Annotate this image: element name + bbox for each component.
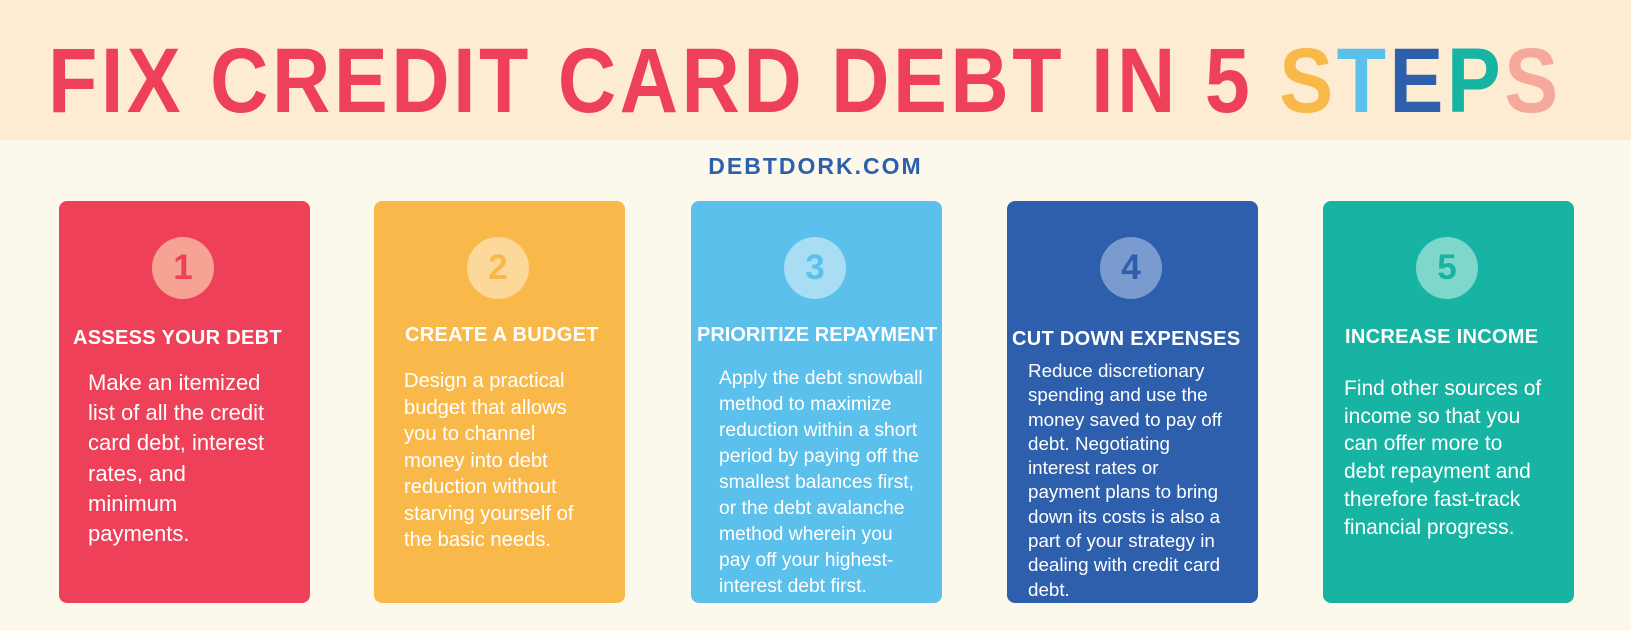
text 1: rates, and bbox=[88, 461, 186, 486]
text 1: minimum bbox=[88, 491, 177, 516]
text 3 bbox=[719, 368, 923, 597]
text 4: Reduce discretionary bbox=[1028, 360, 1204, 381]
text 2: starving yourself of bbox=[404, 502, 573, 524]
text 1: list of all the credit bbox=[88, 400, 264, 425]
icon: number 4: 4 bbox=[1121, 248, 1141, 287]
text 3: period by paying off the bbox=[719, 446, 919, 467]
text 4: dealing with credit card bbox=[1028, 554, 1220, 575]
icon: number 5 bbox=[1416, 237, 1478, 299]
text 3: smallest balances first, bbox=[719, 472, 914, 493]
text 5: income so that you bbox=[1344, 405, 1520, 428]
site url: DEBTDORK.COM bbox=[708, 153, 923, 179]
text 4: money saved to pay off bbox=[1028, 409, 1222, 430]
card 5 bbox=[1323, 201, 1574, 603]
text 4: debt. bbox=[1028, 579, 1070, 600]
text 5: Find other sources of bbox=[1344, 377, 1541, 400]
title: FIX CREDIT CARD DEBT IN 5 STEPS bbox=[48, 30, 1562, 132]
text 4: payment plans to bring bbox=[1028, 481, 1218, 502]
text 2: reduction without bbox=[404, 476, 557, 498]
text 4: down its costs is also a bbox=[1028, 506, 1220, 527]
text 1 bbox=[88, 370, 264, 546]
text 3: interest debt first. bbox=[719, 576, 867, 597]
icon: number 4 bbox=[1100, 237, 1162, 299]
heading 2: CREATE A BUDGET bbox=[405, 324, 599, 346]
text 4: interest rates or bbox=[1028, 457, 1158, 478]
text 2: budget that allows bbox=[404, 396, 567, 418]
heading 4: CUT DOWN EXPENSES bbox=[1012, 328, 1240, 350]
text 5: therefore fast-track bbox=[1344, 488, 1520, 511]
text 5 bbox=[1344, 377, 1542, 539]
text 4: spending and use the bbox=[1028, 384, 1208, 405]
text 2: Design a practical bbox=[404, 370, 564, 392]
heading 5: INCREASE INCOME bbox=[1345, 326, 1538, 348]
text 4: part of your strategy in bbox=[1028, 530, 1215, 551]
text 2: the basic needs. bbox=[404, 529, 551, 551]
text 2: money into debt bbox=[404, 450, 548, 472]
text 3: or the debt avalanche bbox=[719, 498, 904, 519]
text 2 bbox=[404, 370, 574, 551]
text 1: card debt, interest bbox=[88, 430, 264, 455]
text 1: payments. bbox=[88, 521, 190, 546]
icon: number 2: 2 bbox=[488, 248, 508, 287]
text 5: can offer more to bbox=[1344, 432, 1502, 455]
text 5: debt repayment and bbox=[1344, 460, 1531, 483]
icon: number 5: 5 bbox=[1437, 248, 1457, 287]
heading 1: ASSESS YOUR DEBT bbox=[73, 327, 282, 349]
card 2 bbox=[374, 201, 625, 603]
icon: number 1: 1 bbox=[173, 248, 193, 287]
text 3: pay off your highest- bbox=[719, 550, 893, 571]
heading 3: PRIORITIZE REPAYMENT bbox=[697, 324, 937, 346]
text 5: financial progress. bbox=[1344, 516, 1514, 539]
icon: number 2 bbox=[467, 237, 529, 299]
icon: number 3: 3 bbox=[805, 248, 825, 287]
card 3 bbox=[691, 201, 942, 603]
title band bbox=[0, 0, 1631, 140]
text 3: method wherein you bbox=[719, 524, 893, 545]
text 1: Make an itemized bbox=[88, 370, 260, 395]
icon: number 1 bbox=[152, 237, 214, 299]
card 1 bbox=[59, 201, 310, 603]
text 3: reduction within a short bbox=[719, 420, 917, 441]
text 4 bbox=[1028, 360, 1222, 600]
text 3: method to maximize bbox=[719, 394, 892, 415]
card 4 bbox=[1007, 201, 1258, 603]
icon: number 3 bbox=[784, 237, 846, 299]
text 4: debt. Negotiating bbox=[1028, 433, 1170, 454]
text 2: you to channel bbox=[404, 423, 535, 445]
text 3: Apply the debt snowball bbox=[719, 368, 923, 389]
